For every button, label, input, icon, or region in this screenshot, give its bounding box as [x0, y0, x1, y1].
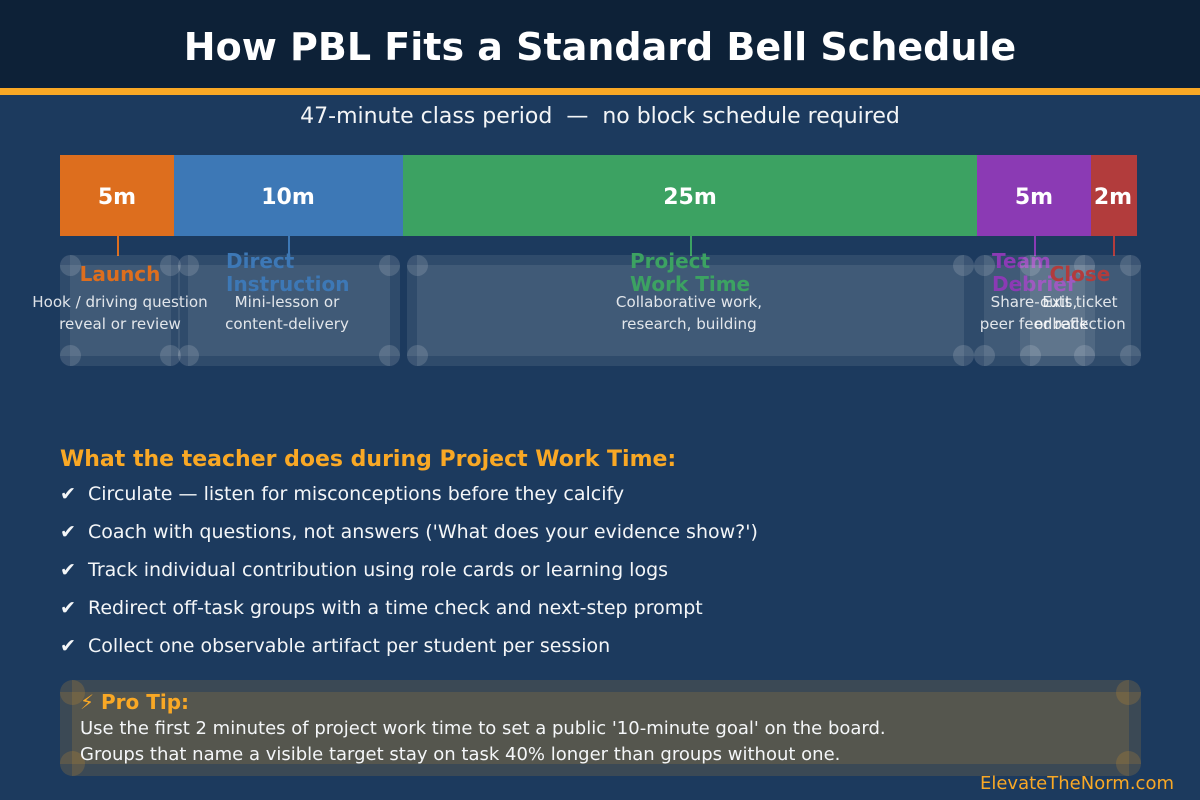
panel: team debrief: Share-outs, [991, 293, 1077, 311]
item 5: ✔ [60, 635, 76, 657]
callout: pro tip [60, 680, 1141, 776]
item 1: ✔ [60, 483, 76, 505]
panel: direct instruction [178, 249, 400, 366]
panel: team debrief: Team [992, 249, 1051, 273]
panel: close: or reflection [1034, 315, 1126, 333]
connector: launch [117, 236, 119, 256]
panel: launch [32, 255, 208, 366]
checklist [60, 483, 758, 657]
panel: launch: reveal or review [59, 315, 181, 333]
panel: project work time: Collaborative work, [616, 293, 762, 311]
segment: launch 5m: 5m [98, 185, 136, 210]
item 1: Circulate — listen for misconceptions before they calcify [88, 483, 624, 505]
connector: direct instruction [288, 236, 290, 256]
segment: team debrief 5m: 5m [1015, 185, 1053, 210]
item 2: ✔ [60, 521, 76, 543]
connector: project work time [690, 236, 692, 256]
panel: launch: Launch [80, 262, 160, 286]
item 5: Collect one observable artifact per student per session [88, 635, 610, 657]
item 3: ✔ [60, 559, 76, 581]
panel: direct instruction: Instruction [226, 272, 350, 296]
panel: launch: Hook / driving question [32, 293, 208, 311]
panel: project work time [407, 249, 974, 366]
segment: launch 5m [60, 155, 174, 236]
pro tip body: Use the first 2 minutes of project work time to set a public '10-minute goal' on the board. [80, 718, 886, 739]
item 3: Track individual contribution using role cards or learning logs [87, 559, 668, 581]
segment: project work time 25m [403, 155, 977, 236]
panel: close: Exit ticket [1042, 293, 1118, 311]
segment: direct instruction 10m [174, 155, 403, 236]
panel: team debrief [974, 249, 1095, 366]
callout: pro tip: Groups that name a visible target stay on task 40% longer than groups without one. [80, 744, 840, 765]
panel: team debrief: Debrief [992, 272, 1076, 296]
panel: project work time: Project [630, 249, 711, 273]
panel: direct instruction: content-delivery [225, 315, 349, 333]
panel: close: Close [1050, 262, 1110, 286]
segment: team debrief 5m [977, 155, 1091, 236]
connector: close [1113, 236, 1115, 256]
segment: direct instruction 10m: 10m [261, 185, 315, 210]
item 2: Coach with questions, not answers ('What does your evidence show?') [88, 521, 758, 543]
panel: project work time: Work Time [630, 272, 750, 296]
panel: project work time: research, building [621, 315, 757, 333]
panel: direct instruction: Mini-lesson or [235, 293, 340, 311]
timeline bar [60, 155, 1137, 236]
title: How PBL Fits a Standard Bell Schedule [184, 25, 1016, 69]
segment: close 2m [1091, 155, 1137, 236]
connector: team debrief [1034, 236, 1036, 256]
segment: project work time 25m: 25m [663, 185, 717, 210]
segment: close 2m: 2m [1094, 185, 1132, 210]
panel: close [1020, 255, 1141, 366]
subtitle: 47-minute class period — no block schedule required [300, 104, 900, 129]
item 4: Redirect off-task groups with a time check and next-step prompt [88, 597, 703, 619]
pro tip heading: ⚡ Pro Tip: [80, 690, 189, 714]
panel: team debrief: peer feedback [980, 315, 1089, 333]
footer brand: ElevateTheNorm.com [980, 773, 1174, 794]
section heading: What the teacher does during Project Work Time: [60, 447, 676, 472]
panel: direct instruction: Direct [226, 249, 295, 273]
header band [0, 0, 1200, 95]
item 4: ✔ [60, 597, 76, 619]
